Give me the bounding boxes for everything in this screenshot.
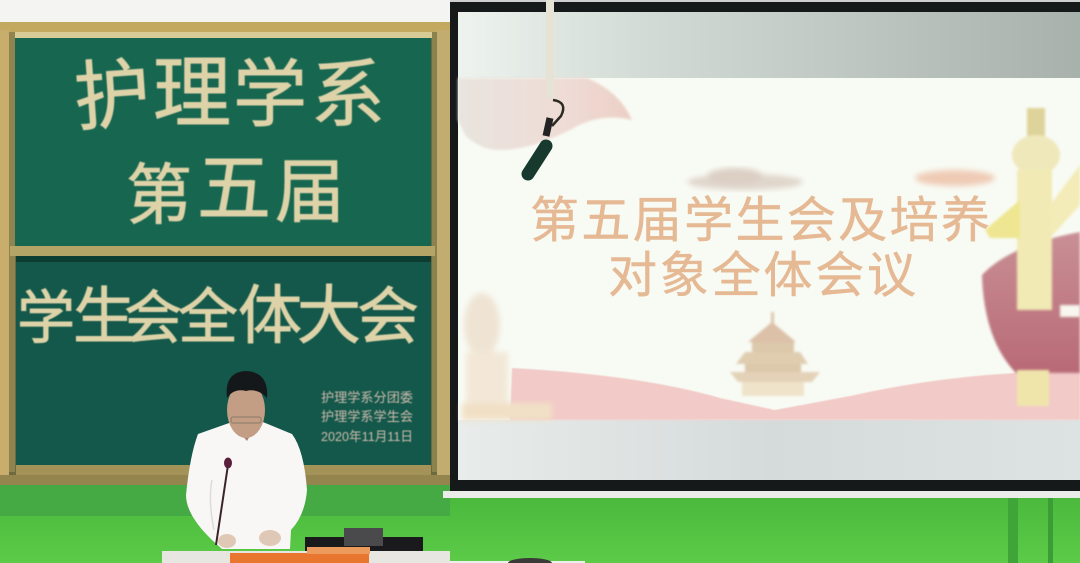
chalk heading: department: 理 [153, 31, 231, 143]
slide title: 对象全体会议 [608, 249, 916, 303]
slide decoration: red flag top left [458, 78, 632, 150]
chalk signature block: 2020年11月11日 [321, 429, 413, 444]
green lower wall [0, 484, 1080, 563]
chalk heading: department [70, 31, 385, 146]
slide decoration: huabiao column [985, 108, 1080, 406]
chalk heading: fifth session: 第 [126, 142, 192, 238]
slide title [530, 194, 990, 303]
neck [232, 422, 258, 441]
chalk heading: fifth session [126, 129, 345, 238]
chalk heading: general assembly [17, 265, 419, 357]
projector screen frame [443, 0, 1080, 498]
chalk signature block: 护理学系分团委 [321, 390, 413, 405]
podium [162, 547, 585, 563]
slide top band [458, 12, 1080, 78]
lower chalkboard panel [16, 256, 431, 465]
chalk heading: general assembly: 会 [357, 266, 419, 356]
slide bottom band [458, 420, 1080, 480]
white shirt [186, 420, 307, 549]
slide decoration: clouds [687, 168, 995, 190]
speaker [186, 371, 307, 549]
chalk heading: department: 学 [233, 35, 307, 142]
chalk heading: general assembly: 生 [73, 266, 135, 356]
chalk signature block [321, 390, 413, 444]
monitor on desk [305, 528, 423, 551]
chalk heading: general assembly: 全 [178, 269, 238, 356]
upper chalkboard panel [15, 38, 431, 246]
chalkboard frame [0, 22, 450, 485]
hands [259, 530, 281, 546]
upper white wall [0, 0, 450, 24]
slide decoration: red banner bottom [510, 368, 1080, 420]
slide decoration: stone lion [462, 293, 552, 420]
hanging microphone [528, 0, 563, 174]
chalk heading: general assembly: 体 [238, 265, 302, 357]
projector screen [458, 12, 1080, 480]
chalk heading: fifth session: 五 [197, 129, 271, 236]
chalk signature block: 护理学系学生会 [321, 409, 413, 424]
chalk heading: fifth session: 届 [275, 136, 345, 237]
chalk heading: general assembly: 学 [17, 271, 75, 355]
slide decoration: red ribbon right [982, 232, 1080, 373]
chalk heading: general assembly: 大 [297, 265, 361, 357]
slide decoration: temple [730, 312, 820, 396]
chalk heading: department: 系 [311, 35, 385, 142]
desk microphone [216, 458, 232, 545]
head [227, 382, 265, 438]
chalk heading: general assembly: 会 [124, 271, 182, 355]
slide title: 第五届学生会及培养 [530, 194, 990, 248]
chalk heading: department: 护 [70, 31, 154, 146]
